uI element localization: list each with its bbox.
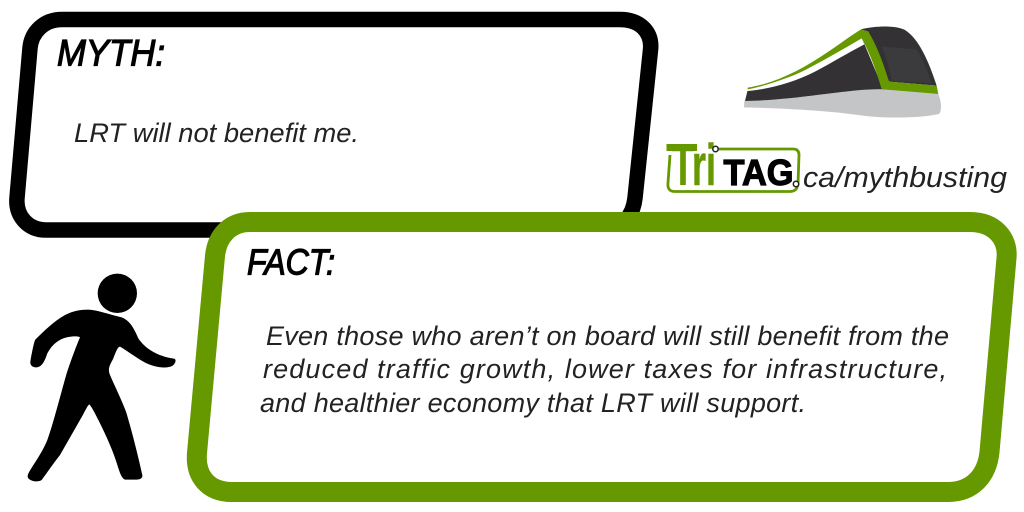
- train green stripe: [748, 29, 938, 94]
- fact box outline: [197, 222, 1007, 492]
- train window: [882, 47, 932, 83]
- train dark body: [745, 42, 883, 101]
- logo: TriTAG: [666, 133, 799, 198]
- fact text block: Even those who aren’t on board will still benefit from the: [266, 321, 949, 351]
- icon: LRT train: [744, 27, 941, 118]
- logo green frame: [668, 149, 799, 192]
- logo top bar: [666, 144, 697, 151]
- logo dot ring: [713, 146, 718, 152]
- panel: myth: [17, 20, 651, 230]
- logo end ring: [793, 181, 799, 187]
- myth statement: LRT will not benefit me.: [74, 118, 359, 148]
- logo Tri wordmark: Tri: [672, 133, 716, 198]
- pedestrian body: [28, 310, 176, 481]
- myth box outline: [17, 20, 651, 230]
- website address: ca/mythbusting: [803, 162, 1007, 194]
- icon: walking pedestrian: [28, 274, 176, 481]
- train grey skirt: [744, 89, 941, 118]
- train white stripe: [747, 38, 864, 91]
- fact text block: and healthier economy that LRT will support.: [260, 388, 806, 418]
- pedestrian head: [98, 274, 137, 313]
- panel: fact: [197, 222, 1007, 492]
- train dark roof: [861, 27, 937, 86]
- myth heading: MYTH:: [57, 32, 165, 74]
- logo TAG wordmark: TAG: [724, 152, 794, 193]
- fact text block: reduced traffic growth, lower taxes for infrastructure,: [263, 354, 947, 384]
- fact heading: FACT:: [247, 242, 335, 282]
- fact text block: [260, 321, 949, 418]
